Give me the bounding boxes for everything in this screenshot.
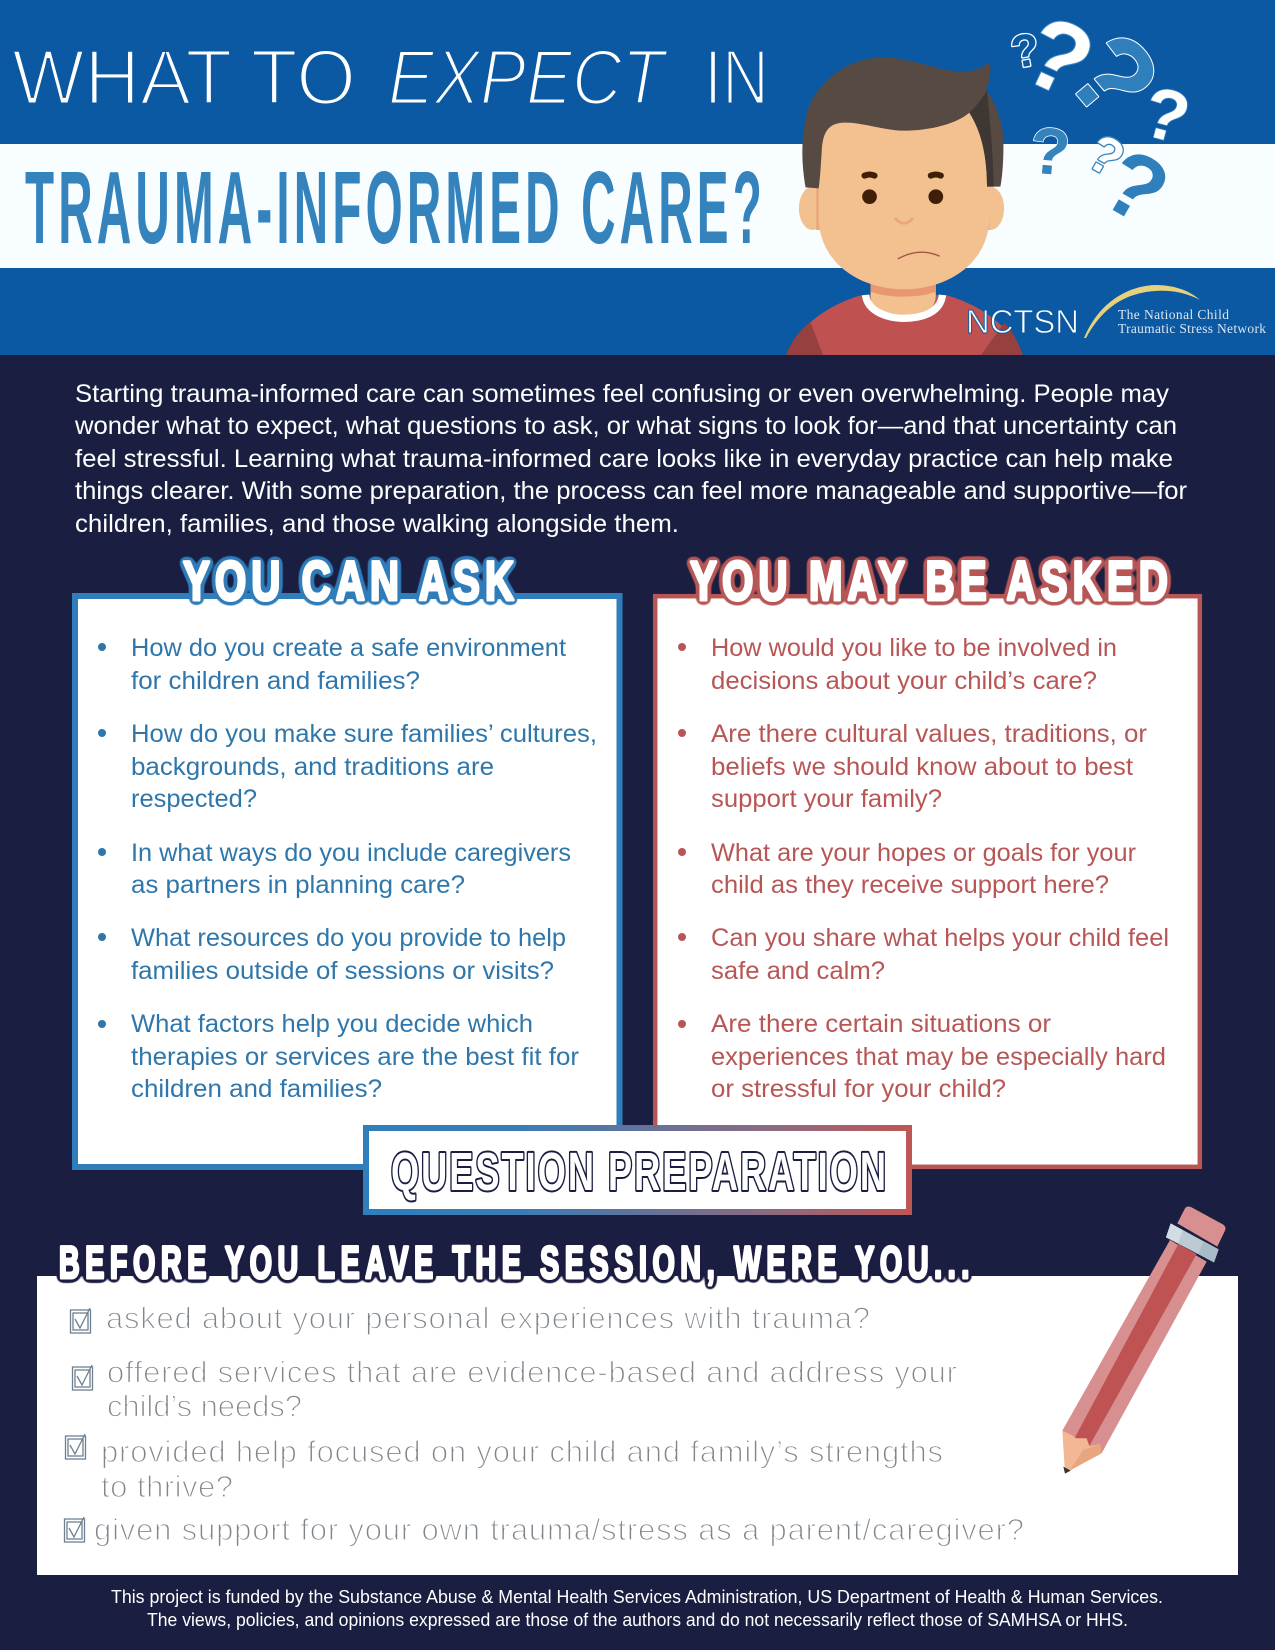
list: questions you may be asked: Are there certain situations or	[711, 1010, 1051, 1038]
title line 1	[12, 33, 769, 121]
header banner	[0, 0, 1275, 355]
title line 1: EXPECT	[388, 33, 669, 121]
list: questions you may be asked: child as they receive support here?	[711, 871, 1109, 899]
title line 1: IN	[704, 33, 769, 121]
list: questions you may be asked: How would you like to be involved in	[711, 634, 1117, 662]
icon: checkbox	[64, 1517, 84, 1542]
footer credits: The views, policies, and opinions expressed are those of the authors and do not necessarily reflect those of SAMHSA or HHS.	[147, 1609, 1128, 1630]
list: questions you may be asked: What are your hopes or goals for your	[711, 839, 1136, 867]
intro paragraph: things clearer. With some preparation, the process can feel more manageable and supportive—for	[75, 477, 1187, 505]
icon: checkbox	[66, 1434, 86, 1459]
checklist item 3: to thrive?	[101, 1469, 233, 1504]
checklist item 4: given support for your own trauma/stress as a parent/caregiver?	[94, 1512, 1024, 1547]
list: questions you can ask: In what ways do you include caregivers	[131, 839, 571, 867]
icon: question marks	[1007, 0, 1198, 245]
list: questions you may be asked: support your family?	[711, 785, 942, 813]
list: questions you can ask: What factors help you decide which	[131, 1010, 533, 1038]
panel: you can ask	[75, 596, 620, 1167]
icon: question marks: ?	[1007, 22, 1044, 78]
list: questions you may be asked: decisions about your child’s care?	[711, 667, 1097, 695]
face	[819, 100, 989, 289]
intro paragraph: feel stressful. Learning what trauma-informed care looks like in everyday practice can help make	[75, 445, 1173, 473]
checklist item 2	[72, 1354, 957, 1424]
facial features	[862, 189, 877, 204]
list: questions you can ask: What resources do you provide to help	[131, 924, 566, 952]
icon: pencil	[1062, 1207, 1226, 1474]
logo: NCTSN: The National Child	[1118, 307, 1229, 322]
list: questions you may be asked: beliefs we should know about to best	[711, 753, 1133, 781]
list: questions you may be asked: Are there cultural values, traditions, or	[711, 720, 1147, 748]
intro paragraph	[74, 380, 1187, 538]
intro paragraph: Starting trauma-informed care can sometimes feel confusing or even overwhelming. People may	[75, 380, 1169, 408]
icon: question marks: ?	[1027, 112, 1073, 190]
shirt	[786, 295, 1023, 355]
list: questions you may be asked: experiences that may be especially hard	[711, 1043, 1166, 1071]
panel: before you leave checklist	[37, 1276, 1238, 1575]
footer credits	[111, 1586, 1163, 1630]
list: questions you may be asked: or stressful for your child?	[711, 1075, 1006, 1103]
list: questions you may be asked: safe and calm?	[711, 957, 885, 985]
icon: question marks: ?	[1135, 71, 1198, 160]
intro paragraph: children, families, and those walking alongside them.	[75, 510, 679, 538]
hair	[802, 57, 1003, 188]
list: questions you can ask	[98, 634, 597, 1103]
list: questions you can ask: respected?	[131, 785, 257, 813]
title line 1: WHAT TO	[12, 33, 356, 121]
list: questions you can ask: families outside of sessions or visits?	[131, 957, 554, 985]
checklist item 2: child’s needs?	[107, 1388, 302, 1424]
heading: you can ask: YOU CAN ASK	[183, 549, 519, 612]
panel: you may be asked	[655, 596, 1200, 1167]
icon: checkbox	[70, 1308, 90, 1333]
checklist item 3	[66, 1434, 943, 1504]
list: questions you may be asked: Can you share what helps your child feel	[711, 924, 1169, 952]
banner: question preparation	[363, 1125, 912, 1215]
checklist item 3: provided help focused on your child and family’s strengths	[101, 1434, 943, 1469]
neck and collar	[871, 280, 936, 318]
ears	[799, 187, 826, 230]
intro paragraph: wonder what to expect, what questions to ask, or what signs to look for—and that uncertainty can	[74, 412, 1177, 440]
list: questions you can ask: therapies or services are the best fit for	[131, 1043, 579, 1071]
list: questions you can ask: children and families?	[131, 1075, 382, 1103]
icon: checkbox	[72, 1365, 92, 1390]
list: questions you may be asked	[678, 634, 1169, 1103]
list: questions you can ask: for children and families?	[131, 667, 420, 695]
list: questions you can ask: as partners in planning care?	[131, 871, 465, 899]
list: questions you can ask: How do you create a safe environment	[131, 634, 566, 662]
logo: NCTSN: NCTSN	[966, 303, 1079, 340]
banner: question preparation: QUESTION PREPARATION	[391, 1142, 888, 1202]
footer credits: This project is funded by the Substance Abuse & Mental Health Services Administration, US Department of Health & Human Services.	[111, 1586, 1163, 1607]
list: questions you can ask: backgrounds, and traditions are	[131, 753, 494, 781]
checklist item 2: offered services that are evidence-based and address your	[107, 1354, 957, 1390]
list: questions you can ask: How do you make sure families’ cultures,	[131, 720, 597, 748]
icon: question marks: ?	[1077, 123, 1134, 189]
logo: NCTSN	[966, 285, 1266, 340]
icon: question marks: ?	[1086, 129, 1185, 245]
checklist item 1: asked about your personal experiences with trauma?	[106, 1300, 870, 1336]
logo: NCTSN: Traumatic Stress Network	[1118, 321, 1266, 336]
icon: confused boy	[786, 57, 1023, 355]
icon: question marks: ?	[1041, 9, 1184, 145]
